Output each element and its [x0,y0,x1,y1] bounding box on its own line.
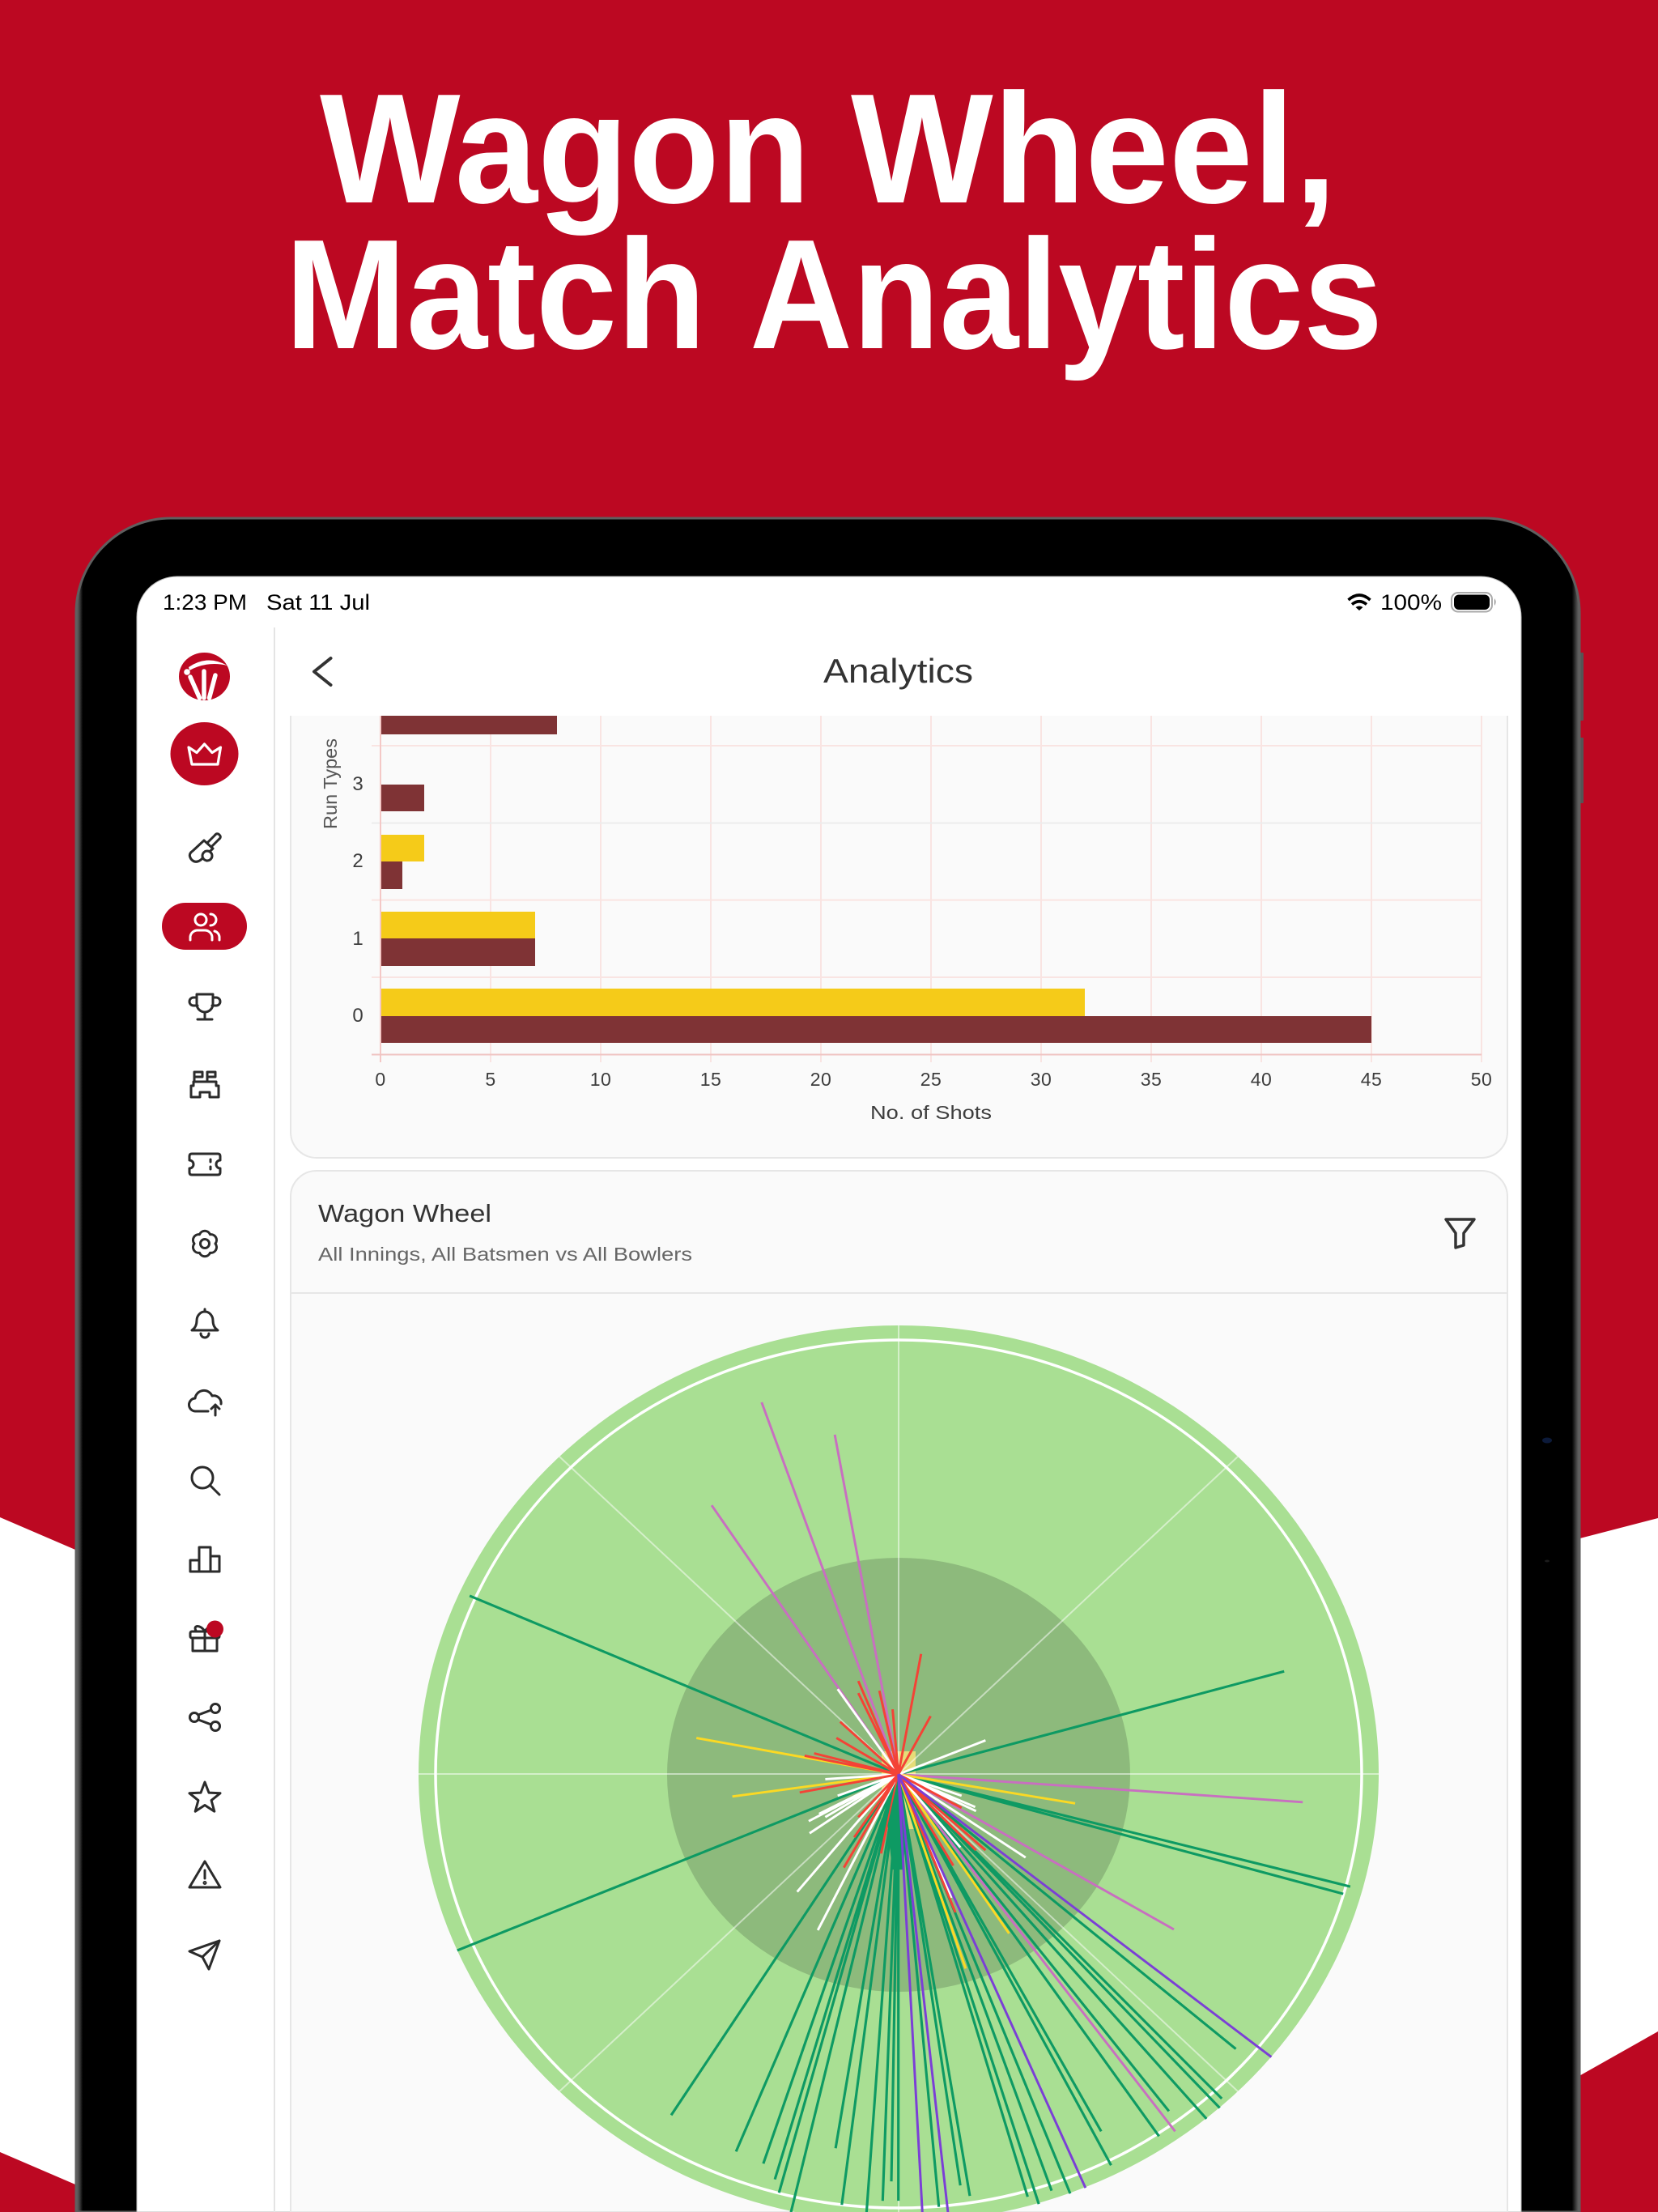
x-axis labels: 35 [1141,1069,1162,1090]
subtitle: All Innings, All Batsmen vs All Bowlers [318,1244,692,1265]
x-axis labels: 30 [1031,1069,1052,1090]
title: Wheel, [851,61,1337,236]
icon: filter [1446,1219,1474,1248]
wagon wheel chart [419,1325,1379,2212]
x-axis labels: 10 [590,1069,611,1090]
heading: analytics: Analytics [823,652,973,690]
x-axis labels: 20 [810,1069,831,1090]
card header divider [291,1292,1507,1294]
y-axis labels [353,776,363,1022]
title: Match [285,206,706,381]
status text: 1:23 PM [163,590,247,615]
x-axis labels: 15 [700,1069,721,1090]
card background [290,716,1508,1159]
icon: search [192,1467,219,1495]
icon: gift [190,1621,223,1651]
shot lines [457,1402,1350,2212]
boundary ring [436,1340,1362,2208]
y-axis title: Run Types [320,738,341,829]
status bar [163,590,1496,615]
x-axis labels: 0 [375,1069,386,1090]
x-axis labels: 50 [1471,1069,1492,1090]
red shots [800,1654,985,1912]
status text [163,590,1442,615]
icon: trophy [189,994,220,1019]
bars: maroon series [381,696,1371,1043]
green shots [457,1596,1350,2212]
icon: bell [192,1309,218,1338]
icon: stadium [191,1072,219,1097]
status text: Sat 11 Jul [266,590,370,615]
tablet body [76,518,1579,2212]
white band left [0,1517,81,2187]
x-axis labels: 25 [920,1069,942,1090]
panel: run types bar chart [290,716,1508,1159]
icon: app logo [179,653,230,700]
header [314,652,973,690]
tablet screen [137,576,1521,2212]
grid [372,716,1482,1062]
icon: crown button [170,722,238,785]
panel: wagon wheel card [291,1171,1507,2212]
active item: players [162,903,247,950]
notification dot [206,1621,223,1637]
x-axis labels: 40 [1251,1069,1272,1090]
icon: bar chart [190,1547,219,1572]
pitch [882,1751,916,1829]
icon: settings gear [193,1231,217,1257]
icon: share [189,1704,220,1731]
panel: sidebar navigation [162,653,247,1969]
icon: battery [1452,593,1496,612]
purple shots [899,1774,1271,2212]
heading: wagon wheel: Wagon Wheel [318,1199,491,1227]
x-axis labels [376,1073,1491,1086]
white shots [797,1689,1026,1930]
inner circle [667,1558,1130,1992]
icon: send [189,1941,219,1969]
bars: yellow series [381,835,1085,1016]
tablet device [76,518,1584,2212]
icon: bat and ball [189,834,220,861]
yellow shots [696,1738,1075,1968]
pink shots [712,1402,1303,2131]
camera dot [1542,1438,1552,1443]
green wedge where shots overlap [887,1776,907,1870]
side buttons [1579,653,1584,803]
icon: ticket [189,1154,220,1175]
icon: wifi [1349,595,1370,610]
x-axis labels: 45 [1361,1069,1382,1090]
sidebar divider [274,627,275,2212]
sensor dot [1545,1559,1550,1563]
icon: cloud upload [189,1390,221,1415]
white band right [1571,1518,1658,2081]
icon: star [189,1782,220,1811]
title: Wagon [320,61,810,236]
icon: warning [189,1861,220,1887]
x-axis title: No. of Shots [870,1102,992,1123]
icon: back chevron [314,658,330,685]
title [285,61,1383,381]
title: Analytics [750,206,1383,381]
sector lines [419,1325,1379,2212]
status text: 100% [1380,590,1442,615]
y-axis labels: 3 [352,773,363,795]
card background [291,1171,1507,2212]
y-axis labels: 0 [352,1005,363,1027]
outfield [419,1325,1379,2212]
y-axis labels: 2 [352,850,363,872]
x-axis labels: 5 [485,1069,496,1090]
y-axis labels: 1 [352,928,363,950]
